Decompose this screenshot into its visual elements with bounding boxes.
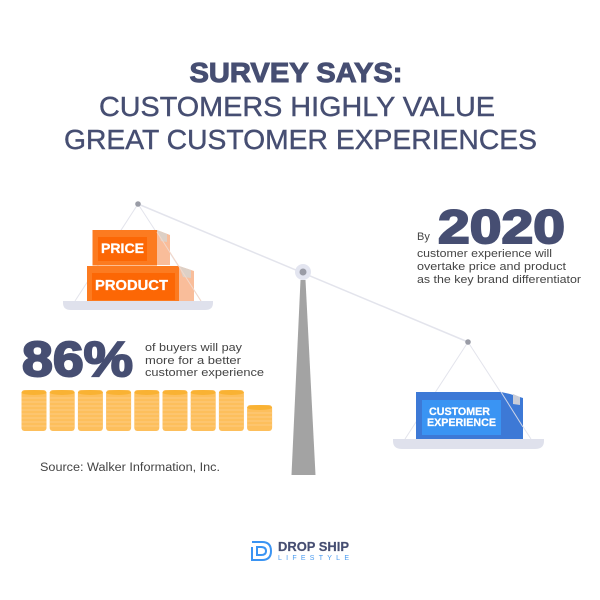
price box: PRICE: [101, 240, 144, 256]
right pan: [393, 439, 544, 449]
stat: 86%: customer experience: [145, 367, 264, 379]
product box: [87, 266, 194, 301]
price box: [92, 230, 170, 266]
logo: [252, 539, 349, 562]
customer experience box: EXPERIENCE: [427, 417, 496, 429]
title: CUSTOMERS HIGHLY VALUE: [99, 91, 495, 122]
customer experience box: [416, 392, 523, 439]
title: SURVEY SAYS:: [190, 57, 402, 88]
logo: LIFESTYLE: [278, 555, 349, 562]
right scale pan with box: [393, 339, 544, 449]
right pivot dot: [465, 339, 471, 345]
strings in front of boxes: [157, 232, 201, 301]
title: GREAT CUSTOMER EXPERIENCES: [64, 124, 537, 155]
title: [64, 57, 537, 155]
scale stand: [292, 280, 316, 475]
source text: Source: Walker Information, Inc.: [40, 462, 220, 474]
stat: 2020: as the key brand differentiator: [417, 274, 581, 286]
left pan: [63, 301, 213, 310]
stat: 86%: of buyers will pay: [145, 342, 243, 354]
stat: 2020: By: [417, 231, 430, 243]
stat: 2020: [417, 200, 581, 286]
scale pivot: [295, 264, 311, 280]
stat: 86%: [22, 333, 264, 387]
left scale pan with boxes: [63, 201, 213, 310]
logo icon: [252, 542, 271, 560]
right hanging strings: [405, 342, 531, 439]
stat: 2020: 2020: [438, 200, 565, 253]
logo: DROP SHIP: [278, 539, 349, 554]
stat: 2020: overtake price and product: [417, 261, 566, 273]
left pivot dot: [135, 201, 141, 207]
stat: 2020: customer experience will: [417, 248, 552, 260]
left hanging strings: [75, 204, 201, 301]
stat: 86%: 86%: [22, 333, 133, 387]
scale beam: [138, 204, 468, 342]
customer experience box: CUSTOMER: [429, 406, 490, 418]
product box: PRODUCT: [95, 278, 168, 294]
stat: 86%: more for a better: [145, 355, 241, 367]
coin stacks chart: [22, 390, 272, 431]
